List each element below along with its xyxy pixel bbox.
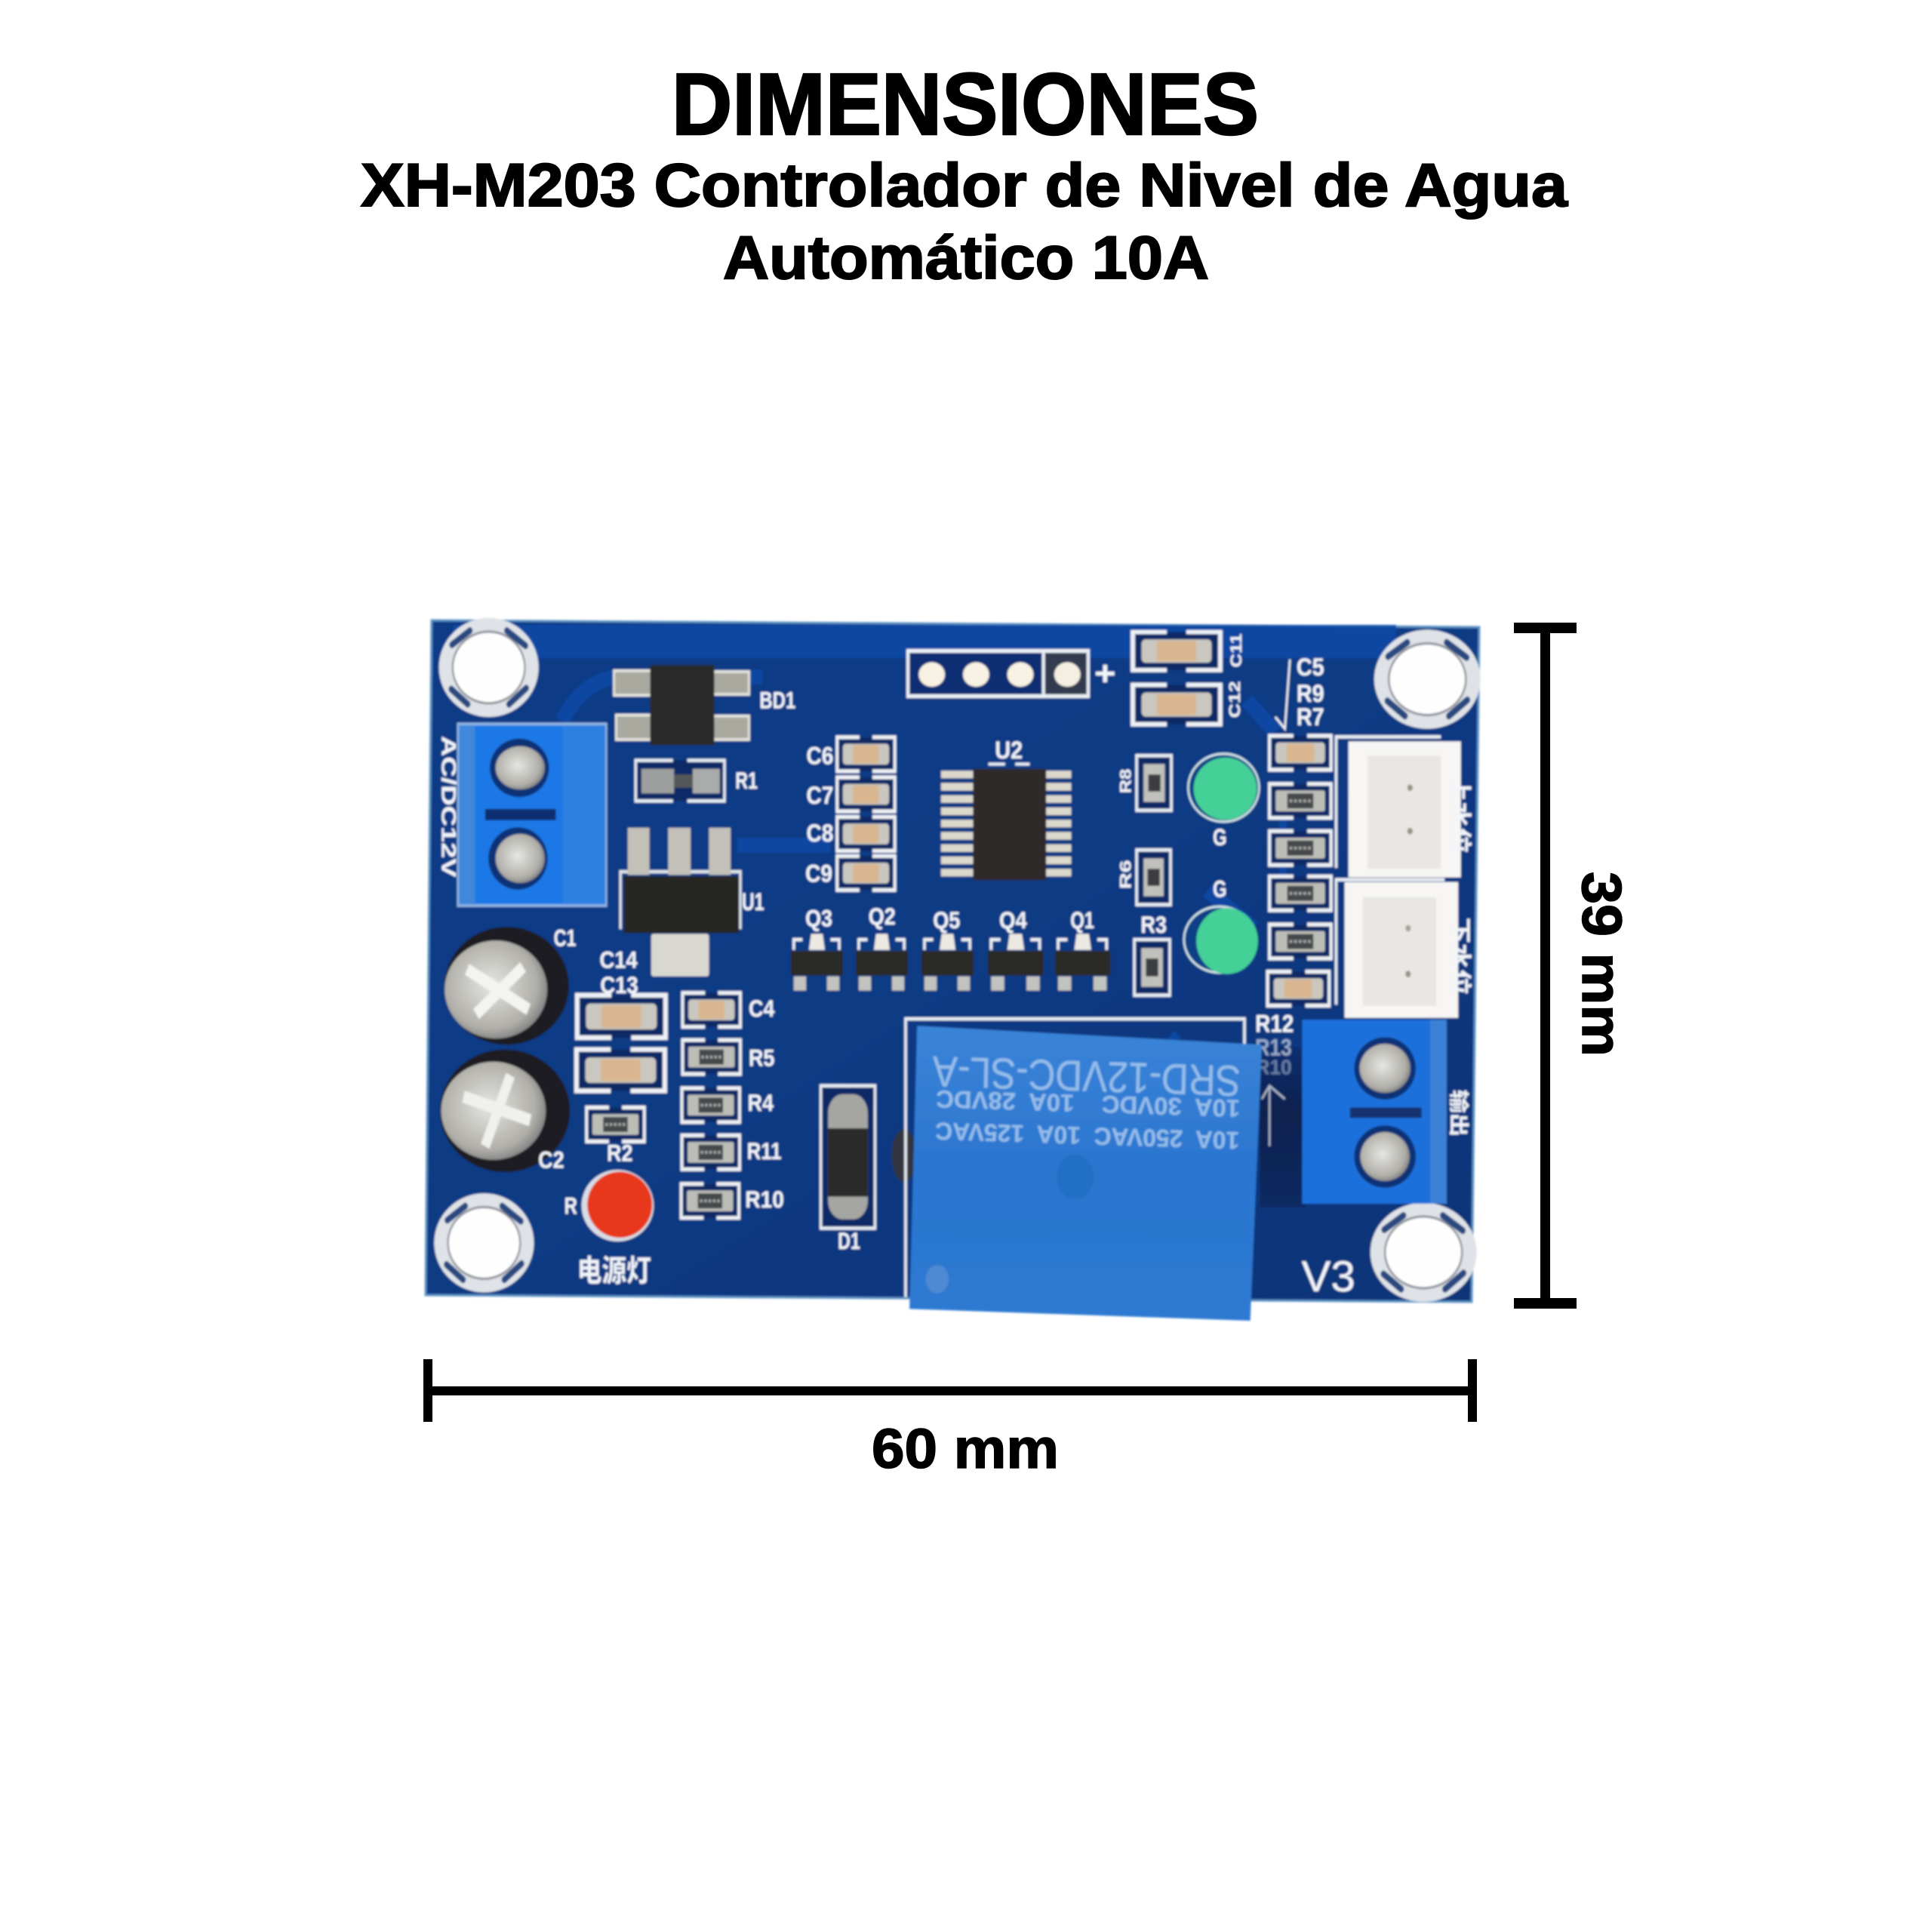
electrolytic capacitor C1: C1 xyxy=(554,925,576,951)
capacitors C6 to C9: C7 xyxy=(807,783,833,810)
relay side labels: R10 xyxy=(1255,1057,1292,1079)
input label: AC/DC12V xyxy=(437,736,460,878)
red power LED: R xyxy=(565,1193,577,1219)
components C4 R5 R4 R11 R10: R10 xyxy=(745,1186,784,1213)
resistors R8 R6 R3: R6 xyxy=(1117,860,1135,889)
capacitors C11 C12: C11 xyxy=(1227,633,1245,667)
output screw terminal xyxy=(1260,1020,1469,1208)
dimension bar: height xyxy=(1514,623,1577,1309)
input screw terminal xyxy=(458,724,606,906)
pcb base xyxy=(426,620,1479,1302)
electrolytic capacitor C1 xyxy=(445,925,576,1044)
green LED lower xyxy=(1184,876,1258,974)
chip U2 xyxy=(941,737,1071,880)
green LED upper: G xyxy=(1213,825,1227,851)
relay: SRD-12VDC-SL-A xyxy=(932,1047,1241,1105)
pin header xyxy=(908,651,1116,696)
icon: mounting holes left xyxy=(434,618,539,1292)
power LED label: 电源灯 xyxy=(577,1254,651,1287)
components C4 R5 R4 R11 R10: R11 xyxy=(747,1138,782,1164)
icon: mounting holes right xyxy=(1371,629,1481,1302)
transistors Q3 Q2 Q5: Q2 xyxy=(869,903,896,930)
capacitors C11 C12: C12 xyxy=(1226,681,1244,718)
resistor column: R9 xyxy=(1297,681,1324,708)
capacitors C11 C12 xyxy=(1133,632,1245,724)
right half components xyxy=(892,629,1481,1321)
capacitors C6 to C9: C9 xyxy=(805,861,832,888)
upper white connector xyxy=(1336,737,1472,877)
resistors R8 R6 R3: R8 xyxy=(1117,769,1135,793)
relay side labels xyxy=(1255,1011,1294,1079)
resistor column xyxy=(1268,654,1331,1005)
transistors Q3 Q2 Q5 xyxy=(791,903,974,990)
subtitle: Automático 10A xyxy=(723,224,1209,292)
capacitors C13 and C14: C13 xyxy=(600,972,638,998)
electrolytic capacitor C2 xyxy=(440,1050,570,1173)
components C4 R5 R4 R11 R10 xyxy=(681,993,784,1218)
transistors Q3 Q2 Q5: Q5 xyxy=(933,907,960,934)
arrow on board xyxy=(1262,1086,1285,1146)
lower white connector xyxy=(1336,880,1472,1018)
transistors Q4 Q1 xyxy=(988,908,1110,990)
green LED lower: G xyxy=(1213,876,1227,903)
capacitors C13 and C14: C14 xyxy=(599,946,638,973)
resistors R8 R6 R3 xyxy=(1117,755,1171,995)
capacitors C6 to C9 xyxy=(805,737,895,890)
red power LED xyxy=(565,1170,654,1241)
components C4 R5 R4 R11 R10: R5 xyxy=(749,1044,774,1071)
board: PCB module photo illustration xyxy=(426,618,1481,1321)
transistors Q4 Q1: Q1 xyxy=(1070,908,1094,934)
subtitle xyxy=(361,152,1568,292)
electrolytic capacitor C2: C2 xyxy=(538,1146,565,1173)
transistors Q4 Q1: Q4 xyxy=(999,908,1027,934)
U1 regulator: U1 xyxy=(742,889,764,916)
components C4 R5 R4 R11 R10: C4 xyxy=(749,995,775,1022)
capacitors C6 to C9: C6 xyxy=(807,743,833,770)
height label: 39 mm xyxy=(1571,872,1633,1057)
capacitors C6 to C9: C8 xyxy=(807,820,833,848)
components C4 R5 R4 R11 R10: R4 xyxy=(748,1090,774,1116)
copper traces xyxy=(453,641,1396,1117)
board revision label: V3 xyxy=(1301,1253,1355,1301)
R1 resistor: R1 xyxy=(735,768,758,794)
resistor R2: R2 xyxy=(607,1140,632,1166)
left half components xyxy=(434,618,974,1292)
relay xyxy=(892,1019,1262,1321)
subtitle: XH-M203 Controlador de Nivel de Agua xyxy=(361,152,1568,220)
diode D1 xyxy=(821,1086,875,1254)
U1 regulator xyxy=(620,828,764,977)
relay side labels: R12 xyxy=(1255,1011,1294,1038)
width label: 60 mm xyxy=(872,1417,1059,1480)
title: DIMENSIONES xyxy=(672,55,1259,153)
capacitors C13 and C14 xyxy=(577,946,666,1091)
resistor column: R7 xyxy=(1297,704,1324,731)
transistors Q3 Q2 Q5: Q3 xyxy=(805,905,832,931)
relay side labels: R13 xyxy=(1255,1035,1292,1061)
R1 resistor xyxy=(635,761,758,801)
upper white connector: 上水位 xyxy=(1447,776,1472,854)
diode D1: D1 xyxy=(838,1228,860,1254)
relay: 10A 250VAC 10A 125VAC xyxy=(935,1117,1239,1154)
BD1 bridge rectifier: BD1 xyxy=(759,688,795,713)
chip U2: U2 xyxy=(995,737,1023,764)
output screw terminal: 输出 xyxy=(1447,1090,1469,1137)
lower white connector: 下水位 xyxy=(1447,918,1472,995)
resistor R2 xyxy=(586,1108,645,1166)
relay: 10A 30VDC 10A 28VDC xyxy=(936,1084,1240,1121)
BD1 bridge rectifier xyxy=(614,665,795,746)
resistors R8 R6 R3: R3 xyxy=(1140,912,1167,939)
pin header: + xyxy=(1094,654,1116,692)
resistor column: C5 xyxy=(1297,654,1324,681)
dimension bar: width xyxy=(423,1359,1477,1422)
green LED upper xyxy=(1188,754,1259,851)
